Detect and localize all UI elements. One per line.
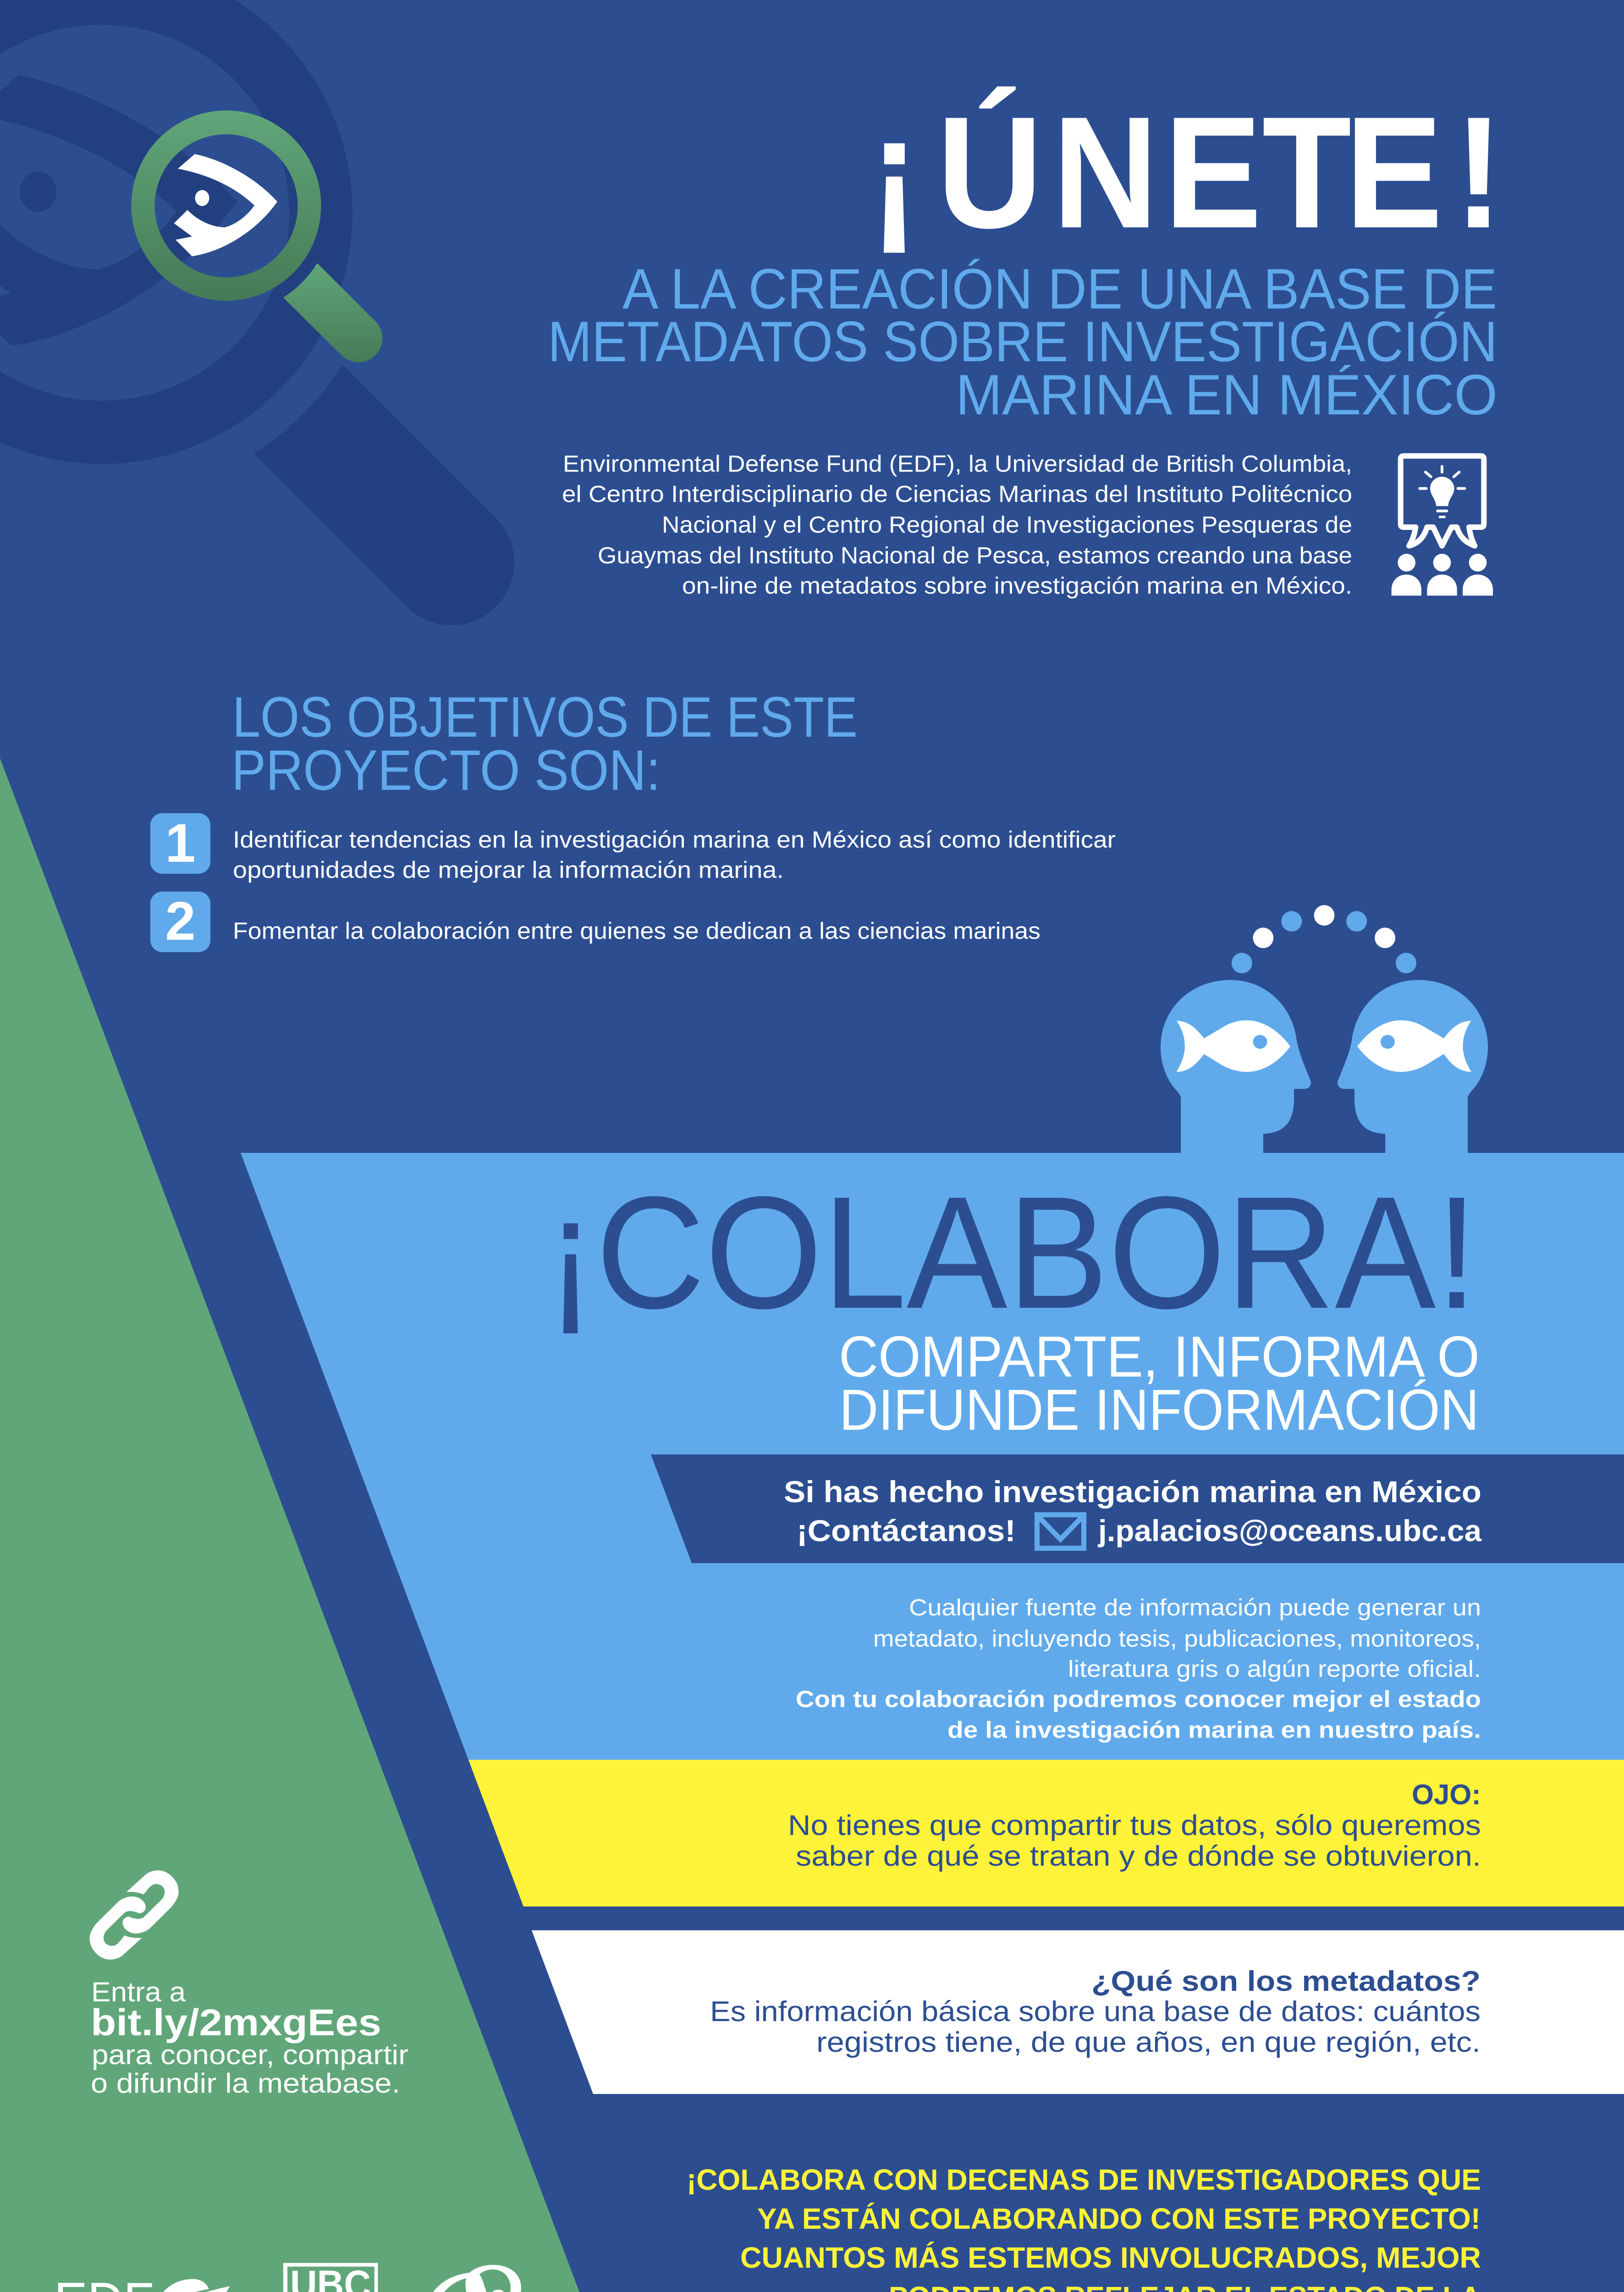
objective 2: 2	[165, 891, 196, 952]
heading: objectives: LOS OBJETIVOS DE ESTE	[232, 686, 858, 749]
background magnifying glass with fish	[0, 0, 514, 625]
text block: link: bit.ly/2mxgEes	[91, 2002, 381, 2044]
subheading: comparte: DIFUNDE INFORMACIÓN	[839, 1377, 1479, 1442]
panel: metadatos	[532, 1930, 1624, 2094]
title: ¡ÚNETE!	[870, 83, 1503, 261]
call to action: CUANTOS MÁS ESTEMOS INVOLUCRADOS, MEJOR	[740, 2241, 1481, 2274]
subtitle: METADATOS SOBRE INVESTIGACIÓN	[548, 310, 1497, 374]
subtitle: A LA CREACIÓN DE UNA BASE DE	[622, 258, 1497, 321]
intro paragraph	[562, 451, 1352, 599]
panel: ojo: OJO:	[1412, 1779, 1481, 1811]
subtitle	[548, 258, 1497, 427]
subtitle: MARINA EN MÉXICO	[956, 364, 1497, 427]
text block: cualquier fuente: Cualquier fuente de información puede generar un	[909, 1594, 1481, 1620]
logo: CICIMAR-IPN	[426, 2267, 532, 2292]
text block: cualquier fuente: Con tu colaboración podremos conocer mejor el estado	[796, 1686, 1481, 1712]
text block: cualquier fuente: metadato, incluyendo tesis, publicaciones, monitoreos,	[873, 1625, 1481, 1652]
text block: cualquier fuente	[796, 1594, 1481, 1743]
objective 1: 1	[165, 813, 196, 874]
icon: small magnifying glass with fish	[132, 110, 382, 362]
call to action: ¡COLABORA CON DECENAS DE INVESTIGADORES QUE	[687, 2163, 1481, 2196]
call to action: YA ESTÁN COLABORANDO CON ESTE PROYECTO!	[757, 2202, 1481, 2235]
icon: envelope	[1037, 1515, 1084, 1548]
objective 2: Fomentar la colaboración entre quienes se dedican a las ciencias marinas	[233, 918, 1040, 944]
subheading: comparte: COMPARTE, INFORMA O	[839, 1324, 1480, 1389]
subheading: comparte	[839, 1324, 1480, 1442]
icon: two heads thinking of fish	[1161, 905, 1488, 1153]
objective 1	[150, 813, 1116, 883]
panel: ojo	[468, 1760, 1624, 1906]
panel: metadatos: registros tiene, de que años, en que región, etc.	[816, 2027, 1481, 2058]
text block: link	[91, 1977, 408, 2099]
text block: link: para conocer, compartir	[92, 2039, 408, 2070]
intro paragraph: Guaymas del Instituto Nacional de Pesca, estamos creando una base	[598, 542, 1352, 568]
intro paragraph: Environmental Defense Fund (EDF), la Universidad de British Columbia,	[563, 451, 1352, 477]
text block: link: Entra a	[91, 1977, 186, 2007]
text block: cualquier fuente: de la investigación marina en nuestro país.	[947, 1717, 1481, 1743]
contact band	[651, 1455, 1624, 1563]
panel: colabora	[241, 1153, 1624, 1760]
intro paragraph: Nacional y el Centro Regional de Investigaciones Pesqueras de	[662, 512, 1352, 538]
contact band: Si has hecho investigación marina en México	[784, 1475, 1481, 1509]
contact band: ¡Contáctanos!	[797, 1514, 1016, 1548]
panel: metadatos: ¿Qué son los metadatos?	[1091, 1966, 1481, 1997]
icon: chain link	[89, 1870, 179, 1960]
panel: ojo: saber de qué se tratan y de dónde se obtuvieron.	[796, 1840, 1481, 1872]
panel: ojo: No tienes que compartir tus datos, sólo queremos	[788, 1810, 1481, 1841]
objective 2	[150, 891, 1040, 952]
logo: EDF	[54, 2271, 255, 2292]
panel: metadatos: Es información básica sobre una base de datos: cuántos	[710, 1996, 1481, 2028]
heading: colabora: ¡COLABORA!	[545, 1163, 1478, 1342]
intro paragraph: el Centro Interdisciplinario de Ciencias Marinas del Instituto Politécnico	[562, 481, 1352, 507]
objective 1: oportunidades de mejorar la información marina.	[233, 857, 784, 883]
objective 1: Identificar tendencias en la investigación marina en México así como identificar	[233, 826, 1116, 853]
heading: objectives: PROYECTO SON:	[231, 739, 661, 802]
icon: idea speech bubble with three people	[1392, 456, 1493, 595]
call to action	[687, 2163, 1481, 2292]
text block: link: o difundir la metabase.	[91, 2068, 400, 2099]
green triangle panel	[0, 758, 634, 2292]
contact band: j.palacios@oceans.ubc.ca	[1097, 1514, 1482, 1548]
text block: cualquier fuente: literatura gris o algún reporte oficial.	[1068, 1656, 1481, 1682]
intro paragraph: on-line de metadatos sobre investigación marina en México.	[682, 573, 1352, 599]
heading: objectives	[231, 686, 858, 802]
